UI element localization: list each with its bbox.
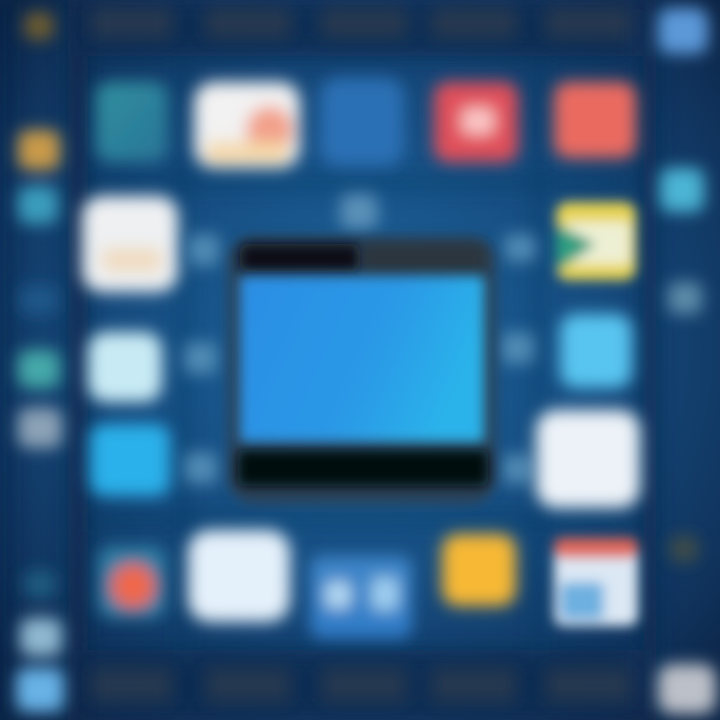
- tablet: [228, 236, 496, 504]
- right column small icons: [658, 8, 716, 714]
- icon: white app left: [82, 196, 178, 292]
- icon: cyan app left: [90, 424, 170, 496]
- connector chips: [184, 234, 536, 484]
- left column small icons: [16, 12, 64, 712]
- tablet top bezel left: [240, 244, 360, 272]
- icon: white and orange app: [194, 82, 300, 168]
- icon: small connector top: [340, 194, 378, 230]
- icon: coral app: [554, 82, 636, 158]
- icon: teal app: [96, 82, 168, 162]
- icon: blue app: [320, 78, 404, 166]
- tablet bottom bezel: [238, 450, 488, 486]
- icon: red circle app: [98, 546, 166, 618]
- bottom row placeholder bars: [92, 668, 630, 702]
- tablet body: [228, 236, 496, 504]
- icon: sky blue app right: [560, 314, 632, 388]
- icon: white app right: [536, 410, 640, 508]
- icon: calendar app: [554, 538, 638, 626]
- icon: red app: [434, 82, 518, 162]
- tablet screen: [240, 276, 484, 442]
- icon: white cloud app: [188, 530, 290, 622]
- icon: yellow app: [442, 534, 516, 606]
- icon: blue folder app: [310, 556, 412, 638]
- top row placeholder bars: [92, 8, 630, 38]
- tablet top bezel right: [362, 244, 486, 272]
- icon: pale blue app left: [88, 332, 162, 402]
- icon: colorful app right: [556, 202, 636, 280]
